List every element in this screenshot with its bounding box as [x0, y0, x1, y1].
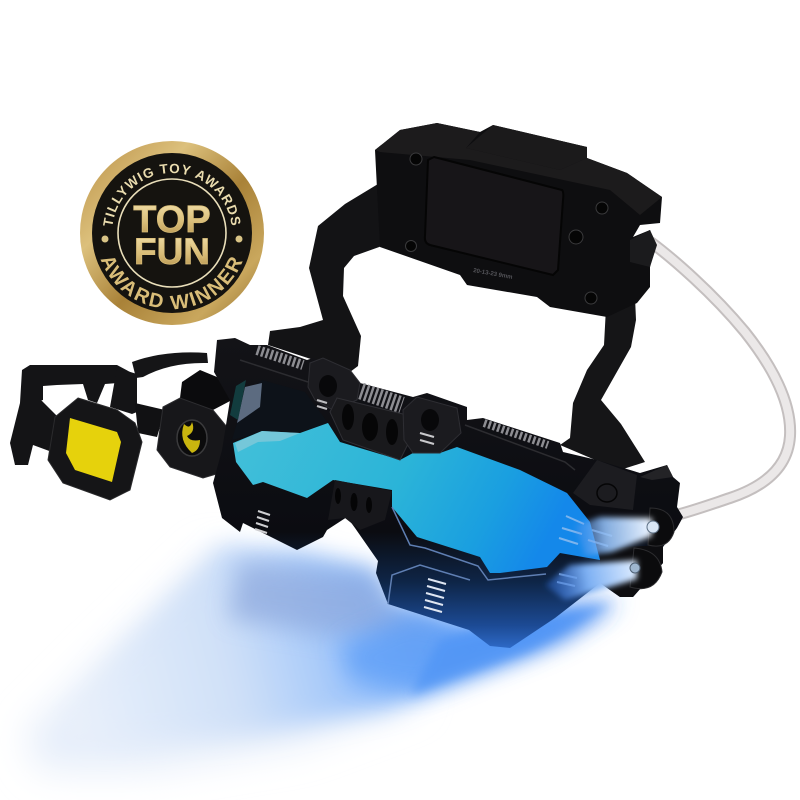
badge bottom arc text: AWARD WINNER: [100, 257, 243, 310]
top rib vents: [257, 350, 548, 445]
second block: [180, 370, 232, 410]
right hinge panel: [573, 460, 637, 510]
goggle frame: [213, 338, 683, 648]
arm connector: [135, 403, 165, 437]
arm curve: [132, 352, 208, 378]
badge inner ring: [118, 179, 226, 287]
arm left band: [10, 399, 58, 465]
panel 1 bars: [317, 400, 327, 409]
LED bulb lower: [630, 563, 640, 573]
left lower bars: [255, 511, 270, 533]
module top bevel: [375, 123, 662, 215]
yellow lens holder: [48, 398, 142, 500]
top bar groove: [240, 360, 575, 470]
panel 2 dial: [421, 409, 439, 431]
cyan lens: [233, 423, 600, 573]
LED bulb upper: [647, 521, 659, 533]
right corner tab: [640, 465, 673, 480]
hinge dial: [597, 484, 617, 502]
clip-on arm with yellow lens: [10, 352, 232, 500]
cable socket: [630, 230, 657, 267]
dark upper lens: [232, 380, 328, 440]
badge black centre: [92, 153, 252, 313]
octagon panel 2: [403, 397, 461, 453]
head strap, right side: [560, 270, 645, 470]
module screws: [406, 153, 608, 304]
panel slots: [342, 404, 398, 445]
badge top arc text: TILLYWIG TOY AWARDS: [103, 164, 240, 226]
right lens bars: [557, 516, 612, 586]
lens top reflection: [235, 431, 300, 452]
panel 1 dial: [319, 375, 337, 397]
yellow crescent: [182, 422, 200, 453]
second lens holder: [157, 398, 227, 478]
holder lens ring: [177, 420, 207, 456]
octagon panel 1: [308, 358, 360, 410]
LED light beam upper: [575, 517, 652, 556]
arm column: [110, 368, 137, 414]
battery module: [375, 123, 662, 317]
badge TOP: TOP: [133, 199, 211, 241]
lower bridge detail: [328, 480, 392, 530]
blue light beam on the surface: [25, 545, 620, 770]
bridge slots: [335, 488, 372, 513]
module top sliding cover: [466, 125, 587, 170]
lower right frame outline: [388, 507, 546, 604]
arm top bar: [20, 365, 130, 403]
white cable: [652, 243, 790, 514]
LED housings: [630, 508, 674, 589]
clear lens reflection: [237, 383, 262, 423]
slotted panel: [330, 398, 415, 460]
badge dots: [102, 236, 242, 242]
module model label: 20-13-23 9mm: [473, 268, 513, 281]
award badge: [80, 141, 264, 325]
yellow lens: [66, 418, 121, 482]
LED end block: [600, 545, 663, 597]
panel 2 bars: [420, 433, 434, 444]
badge FUN: FUN: [134, 231, 210, 272]
head strap, left side: [268, 184, 382, 372]
lower right bars: [424, 579, 446, 612]
teal lens edge: [230, 380, 246, 420]
battery cover: [425, 157, 563, 275]
LED light beam lower: [545, 560, 637, 600]
